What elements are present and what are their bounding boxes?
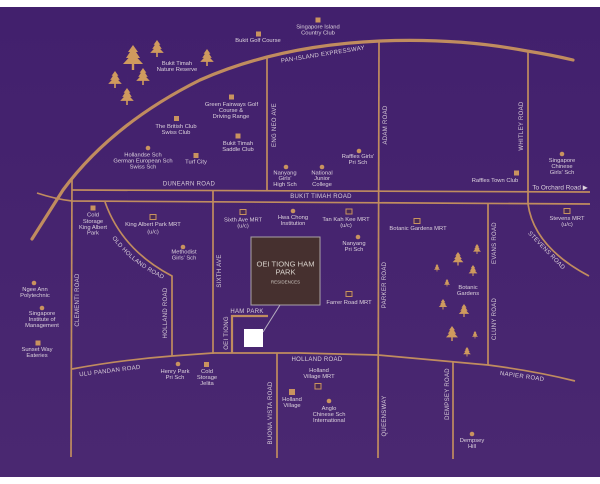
place: Bukit Timah Nature Reserve: Bukit Timah: [162, 61, 192, 67]
place: Botanic Gardens: Botanic: [458, 285, 478, 291]
trees: Bukit Timah Nature Reserve: [108, 40, 214, 105]
place: Nanyang Girls High Sch: Girls': [278, 176, 292, 182]
road: Oei Tiong Ham Park: [232, 316, 268, 353]
place: Turf City: Turf City: [185, 160, 207, 166]
place: Holland Village: [282, 389, 302, 409]
place: Raffles Girls Pri Sch: [342, 149, 374, 166]
place: Tan Kah Kee MRT: [322, 209, 370, 229]
place: Ngee Ann Polytechnic: [20, 281, 50, 299]
place: Singapore Institute of Management: [25, 306, 59, 329]
place: National Junior College: [311, 165, 333, 188]
label: Eng Neo Ave: ENG NEO AVE: [272, 103, 278, 147]
place: international schools: Hollandse Sch: [124, 152, 162, 158]
place: King Albert Park MRT: (u/c): [147, 230, 159, 236]
place: Raffles Girls Pri Sch: Raffles Girls': [342, 154, 374, 160]
place: Tan Kah Kee MRT: Tan Kah Kee MRT: [322, 217, 370, 223]
landmarks south of Bukit Timah: [20, 206, 585, 450]
road: Clementi Road: [71, 180, 72, 457]
place: Anglo Chinese Sch International: [313, 399, 345, 424]
place: Hwa Chong Institution: Institution: [281, 221, 305, 227]
road: Eng Neo Ave: [266, 58, 268, 190]
callout: Oei Tiong Ham Park Residences: [251, 237, 320, 305]
place: Farrer Road MRT: [326, 292, 372, 306]
place: Bukit Timah Saddle Club: Saddle Club: [222, 147, 254, 153]
road: Dempsey Road: [452, 361, 454, 459]
place: Dempsey Hill: Dempsey: [460, 438, 484, 444]
label: Queensway: QUEENSWAY: [382, 395, 388, 437]
label: Dunearn Road: DUNEARN ROAD: [163, 182, 215, 188]
place: Bukit Timah Nature Reserve: Nature Reserve: [157, 67, 197, 73]
label: Adam Road: ADAM ROAD: [383, 105, 389, 145]
place: international schools: Swiss Sch: [130, 164, 156, 170]
place: Botanic Gardens MRT: [389, 218, 447, 232]
place: Green Fairways: Green Fairways Golf: [205, 102, 258, 108]
place: Holland Village MRT: Holland: [309, 368, 329, 374]
label: To Orchard Road: To Orchard Road ▶: [532, 184, 588, 192]
place: Botanic Gardens: [457, 285, 479, 297]
place: Methodist Girls Sch: Methodist: [171, 250, 197, 256]
place: Green Fairways: Course &: [219, 108, 243, 114]
road: Sixth Ave: [212, 190, 214, 354]
place: Raffles Town Club: [472, 170, 519, 184]
place: National Junior College: National: [311, 170, 333, 176]
label: Ulu Pandan Road: ULU PANDAN ROAD: [79, 365, 141, 378]
place: Singapore Chinese Girls Sch: Chinese: [551, 164, 573, 170]
place: Nanyang Girls High Sch: Nanyang: [273, 170, 297, 176]
place: Henry Park Pri Sch: Henry Park: [160, 369, 190, 375]
place: King Albert Park MRT: [125, 214, 181, 236]
place: Bukit Golf Course: [235, 32, 281, 44]
place: Holland Village MRT: Village MRT: [303, 374, 335, 380]
site marker: [244, 305, 280, 347]
label: Clementi Road: CLEMENTI ROAD: [75, 273, 81, 327]
road: Buona Vista Road: [276, 353, 278, 458]
place: Singapore Island Country Club: Country Club: [301, 30, 335, 36]
place: Singapore Island Country Club: [296, 18, 340, 36]
place: The British Club: [155, 116, 197, 136]
label: Stevens Road: STEVENS ROAD: [526, 231, 566, 272]
place: The British Club: Swiss Club: [162, 130, 190, 136]
place: Nanyang Girls High Sch: High Sch: [273, 182, 297, 188]
place: Sixth Ave MRT: (u/c): [237, 224, 249, 230]
place: Nanyang Girls High Sch: [273, 165, 297, 188]
place: Singapore Institute of Management: Singapore: [29, 311, 55, 317]
place: Cold Storage King Albert Park: Park: [87, 230, 99, 236]
place: Bukit Timah Saddle Club: [222, 134, 254, 153]
road: Evans and Cluny Road: [487, 204, 489, 365]
label: Holland Road: HOLLAND ROAD: [292, 357, 343, 363]
road: Old Holland Road: [105, 202, 172, 356]
place: Bukit Timah Saddle Club: Bukit Timah: [223, 141, 253, 147]
place: Anglo Chinese Sch International: Chinese Sch: [313, 412, 345, 418]
road: Bukit Timah Road: [37, 193, 590, 204]
label: Sixth Ave: SIXTH AVE: [217, 254, 223, 288]
road: Pan-Island Expressway: [32, 40, 573, 239]
label: Whitley Road: WHITLEY ROAD: [519, 101, 525, 151]
place: international schools: [113, 146, 173, 170]
label: Parker Road: PARKER ROAD: [382, 261, 388, 308]
trees: Botanic Gardens: [434, 244, 481, 356]
place: Tan Kah Kee MRT: (u/c): [340, 223, 352, 229]
place: Sunset Way Eateries: Sunset Way: [21, 347, 53, 353]
place: Singapore Chinese Girls Sch: Girls' Sch: [550, 170, 574, 176]
place: Singapore Chinese Girls Sch: [549, 152, 575, 176]
label: Evans Road: EVANS ROAD: [492, 222, 498, 264]
place: Nanyang Pri Sch: Pri Sch: [345, 247, 363, 253]
place: Turf City: [185, 153, 207, 166]
place: National Junior College: College: [312, 182, 332, 188]
place: Raffles Girls Pri Sch: Pri Sch: [349, 160, 367, 166]
place: National Junior College: Junior: [314, 176, 330, 182]
place: Singapore Island Country Club: Singapore Island: [296, 24, 340, 30]
place: Cold Storage King Albert Park: [79, 206, 107, 236]
place: Bukit Golf Course: Bukit Golf Course: [235, 38, 281, 44]
place: Stevens MRT: [549, 208, 585, 228]
label: Buona Vista Road: BUONA VISTA ROAD: [268, 381, 274, 445]
label: Pan-Island Expressway: PAN-ISLAND EXPRESSWAY: [281, 45, 365, 65]
label: Holland Road vertical: HOLLAND ROAD: [163, 287, 169, 338]
place: Singapore Chinese Girls Sch: Singapore: [549, 158, 575, 164]
place: Holland Village: Village: [283, 403, 301, 409]
place: Sunset Way Eateries: [21, 340, 53, 359]
place: Green Fairways: [205, 94, 258, 120]
place: Anglo Chinese Sch International: International: [313, 418, 345, 424]
label: Ham Park: HAM PARK: [230, 309, 264, 315]
label: Dempsey Road: DEMPSEY ROAD: [445, 368, 451, 420]
place: Botanic Gardens: Gardens: [457, 291, 479, 297]
place: Holland Village MRT: [303, 368, 335, 389]
place: King Albert Park MRT: King Albert Park MRT: [125, 222, 181, 228]
place: Farrer Road MRT: Farrer Road MRT: [326, 300, 372, 306]
label: Napier Road: NAPIER ROAD: [499, 371, 545, 383]
place: Cold Storage King Albert Park: Storage: [83, 219, 103, 225]
place: Stevens MRT: Stevens MRT: [549, 216, 585, 222]
place: Nanyang Pri Sch: Nanyang: [342, 241, 366, 247]
label: Bukit Timah Road: BUKIT TIMAH ROAD: [290, 194, 352, 200]
place: Botanic Gardens MRT: Botanic Gardens MRT: [389, 226, 447, 232]
label: Old Holland Road: OLD HOLLAND ROAD: [112, 236, 164, 278]
road: Ulu Pandan, Holland and Napier Road: [72, 353, 575, 381]
place: Bukit Timah Nature Reserve: [157, 61, 197, 73]
place: Henry Park Pri Sch: Pri Sch: [166, 375, 184, 381]
place: Singapore Institute of Management: Institute of: [29, 317, 56, 323]
place: Sunset Way Eateries: Eateries: [26, 353, 48, 359]
place: Singapore Institute of Management: Management: [25, 323, 59, 329]
place: Cold Storage Jelita: Cold: [201, 369, 213, 375]
place: Sixth Ave MRT: [224, 210, 263, 230]
place: Cold Storage King Albert Park: Cold: [87, 212, 99, 218]
place: Green Fairways: Driving Range: [213, 114, 249, 120]
road: Adam Road and Queensway: [378, 41, 379, 458]
place: Cold Storage Jelita: Jelita: [200, 381, 215, 387]
place: Cold Storage Jelita: Storage: [197, 375, 217, 381]
callout: Oei Tiong Ham Park Residences: OEI TIONG HAM: [256, 260, 315, 268]
road: Whitley Road and Stevens Road: [528, 52, 589, 276]
place: Holland Village: Holland: [282, 397, 302, 403]
place: Hwa Chong Institution: Hwa Chong: [278, 215, 308, 221]
place: Sixth Ave MRT: Sixth Ave MRT: [224, 218, 263, 224]
place: Cold Storage King Albert Park: King Albert: [79, 225, 107, 231]
callout: Oei Tiong Ham Park Residences: RESIDENCES: [271, 280, 300, 284]
place: Methodist Girls Sch: Girls' Sch: [172, 256, 196, 262]
label: Cluny Road: CLUNY ROAD: [492, 298, 498, 340]
place: Raffles Town Club: Raffles Town Club: [472, 178, 518, 184]
road labels: [74, 45, 588, 445]
landmarks north of Bukit Timah: [113, 18, 575, 188]
place: Stevens MRT: (u/c): [561, 222, 573, 228]
place: The British Club: The British Club: [155, 124, 197, 130]
place: Nanyang Pri Sch: [342, 235, 366, 253]
place: Cold Storage Jelita: [197, 362, 217, 387]
label: Oei Tiong: OEI TIONG: [224, 316, 230, 350]
place: Anglo Chinese Sch International: Anglo: [322, 406, 336, 412]
place: Ngee Ann Polytechnic: Ngee Ann: [22, 287, 48, 293]
place: Ngee Ann Polytechnic: Polytechnic: [20, 293, 50, 299]
place: Methodist Girls Sch: [171, 245, 197, 262]
place: Dempsey Hill: [460, 432, 484, 450]
place: Dempsey Hill: Hill: [468, 444, 476, 450]
place: international schools: German European Sch: [113, 158, 173, 164]
callout: Oei Tiong Ham Park Residences: PARK: [275, 268, 296, 276]
place: Henry Park Pri Sch: [160, 362, 190, 381]
place: Hwa Chong Institution: [278, 209, 308, 227]
road: Dunearn Road: [72, 190, 590, 192]
